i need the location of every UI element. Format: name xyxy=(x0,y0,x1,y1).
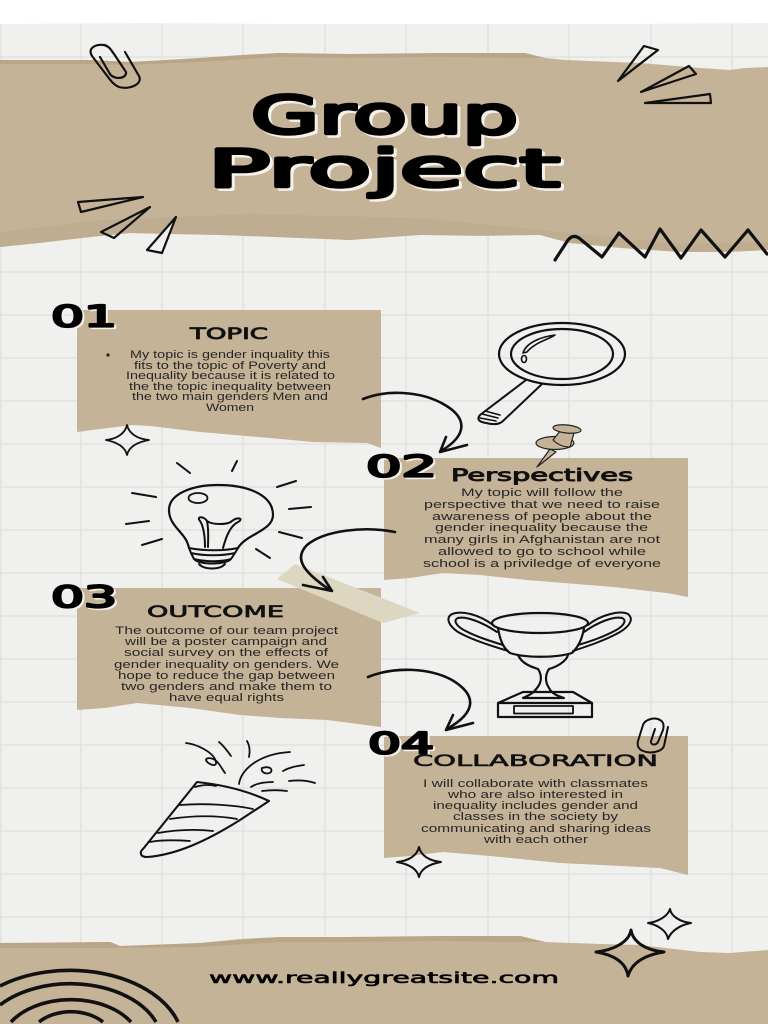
icon: paperclip on collaboration xyxy=(638,719,668,752)
number 03 xyxy=(51,580,119,616)
arrow: topic to perspectives xyxy=(363,393,467,452)
text: outcome body xyxy=(114,625,339,704)
text: topic body: fits to the topic of Poverty and xyxy=(134,360,326,372)
icon: light rays xyxy=(126,461,311,558)
panel: perspectives xyxy=(366,450,688,597)
text: collaboration body: who are also interested in xyxy=(447,789,623,801)
text: outcome body: have equal rights xyxy=(169,692,285,704)
icon: trophy xyxy=(448,613,631,717)
panel: collaboration xyxy=(368,726,688,875)
text: topic body: the two main genders Men and xyxy=(132,391,328,403)
text: topic body: the the topic inequality between xyxy=(129,381,331,393)
washi tape xyxy=(277,564,420,623)
arrow: perspectives to outcome xyxy=(301,529,395,591)
text: outcome body: The outcome of our team project xyxy=(115,625,338,637)
text: perspectives body: allowed to go to school while xyxy=(438,546,646,558)
title: Project xyxy=(208,140,560,200)
number 01: 01 xyxy=(53,301,119,335)
text: perspectives body: My topic will follow the xyxy=(461,487,623,499)
icon: concentric arcs xyxy=(0,970,178,1022)
heading: collaboration: COLLABORATION xyxy=(413,751,658,770)
text: outcome body: gender inequality on genders. We xyxy=(114,659,339,671)
footer website text: www.reallygreatsite.com xyxy=(209,969,559,987)
icon: zigzag line xyxy=(555,229,767,260)
number 02: 02 xyxy=(366,450,437,484)
footer torn paper xyxy=(0,936,768,1024)
number 03: 03 xyxy=(53,582,119,616)
text: topic body xyxy=(126,349,335,414)
text: collaboration body: inequality includes gender and xyxy=(433,800,638,812)
panel: topic xyxy=(51,300,381,448)
icon: push pin xyxy=(536,424,581,467)
number 02: 02 xyxy=(368,451,439,485)
text: perspectives body: perspective that we need to raise xyxy=(424,499,660,511)
text: collaboration body: I will collaborate with classmates xyxy=(423,778,649,790)
heading: topic: TOPIC xyxy=(188,324,268,343)
icon: small star footer xyxy=(648,909,691,939)
icon: large star footer xyxy=(596,930,664,976)
text: topic body: My topic is gender inquality this xyxy=(130,349,331,361)
number 04: 04 xyxy=(370,728,436,762)
title: Group xyxy=(251,86,518,146)
icon: light bulb xyxy=(169,485,273,568)
panel: outcome xyxy=(51,580,381,727)
number 04 xyxy=(368,726,436,762)
text: collaboration body: with each other xyxy=(483,834,589,846)
title: Group xyxy=(254,89,521,149)
text: perspectives body xyxy=(423,487,661,570)
text: collaboration body xyxy=(421,778,652,846)
text: collaboration body: communicating and sharing ideas xyxy=(421,823,652,835)
icon: paperclip top left xyxy=(91,45,140,88)
number 02 xyxy=(366,450,439,485)
icon: star on collaboration xyxy=(397,847,441,877)
heading: outcome: OUTCOME xyxy=(147,602,284,621)
text: perspectives body: many girls in Afghanistan are not xyxy=(424,534,660,546)
heading: perspectives: Perspectives xyxy=(451,466,633,485)
header torn paper banner xyxy=(0,53,768,252)
text: perspectives body: school is a priviledge of everyone xyxy=(423,558,661,570)
arrow: outcome to collaboration xyxy=(368,670,473,730)
text: topic body: Women xyxy=(206,402,254,414)
icon: star under topic xyxy=(106,425,149,455)
text: topic body: Inequality because it is related to xyxy=(126,370,335,382)
text: collaboration body: classes in the society by xyxy=(453,811,619,823)
title: Project xyxy=(211,142,563,202)
icon: magnifying glass xyxy=(478,323,625,424)
number 01: 01 xyxy=(51,300,117,334)
text: perspectives body: awareness of people about the xyxy=(432,511,652,523)
number 03: 03 xyxy=(51,580,117,614)
text: outcome body: two genders and make them to xyxy=(121,681,332,693)
text: perspectives body: gender inequality because the xyxy=(435,522,648,534)
number 04: 04 xyxy=(368,726,434,760)
text: outcome body: social survey on the effects of xyxy=(124,647,329,659)
bullet xyxy=(106,353,110,357)
icon: burst spikes top right xyxy=(618,46,711,103)
text: outcome body: hope to reduce the gap between xyxy=(118,670,335,682)
number 01 xyxy=(51,300,119,335)
icon: burst spikes left xyxy=(78,197,176,253)
title xyxy=(208,86,563,202)
icon: party popper xyxy=(141,741,315,857)
text: outcome body: will be a poster campaign and xyxy=(124,636,327,648)
